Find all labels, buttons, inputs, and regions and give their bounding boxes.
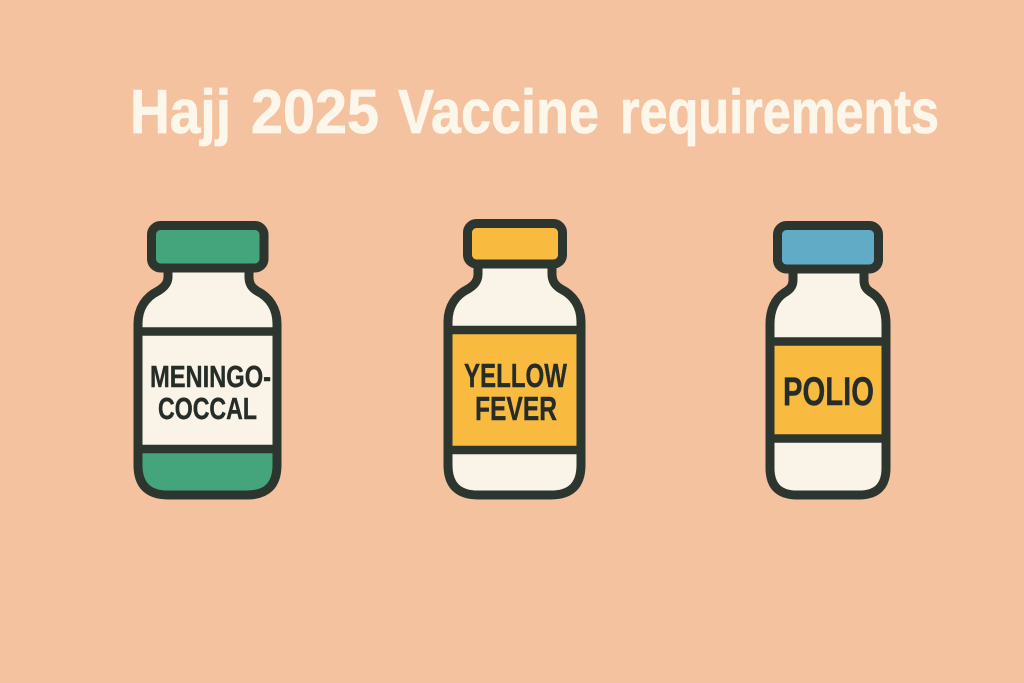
vial body	[770, 269, 886, 495]
infographic canvas	[133, 88, 938, 500]
yellow cap	[468, 224, 562, 264]
title	[130, 78, 939, 147]
green cap	[152, 226, 264, 268]
title: requirements	[620, 78, 939, 147]
label text: MENINGO-	[150, 359, 271, 394]
blue cap	[778, 226, 878, 269]
vial body	[138, 268, 277, 495]
vial: yellow fever	[448, 224, 581, 495]
title: Vaccine	[398, 78, 599, 147]
vial outline	[138, 268, 277, 495]
label text: YELLOW	[464, 357, 568, 394]
vial: polio	[770, 226, 886, 495]
label text: COCCAL	[158, 391, 257, 426]
label text: POLIO	[783, 370, 874, 414]
vial outline	[448, 264, 581, 495]
yellow label	[770, 341, 886, 439]
label text	[464, 357, 568, 427]
label text	[150, 359, 271, 426]
label bands	[770, 342, 886, 438]
green base fill	[142, 453, 272, 490]
vial outline	[770, 269, 886, 495]
title: 2025	[251, 78, 379, 147]
vial: meningococcal	[138, 226, 277, 495]
label bands	[448, 330, 581, 450]
label bands	[138, 332, 277, 449]
title: Hajj	[130, 78, 231, 147]
yellow label	[448, 330, 581, 450]
label text: FEVER	[475, 390, 557, 427]
vial body	[448, 264, 581, 495]
